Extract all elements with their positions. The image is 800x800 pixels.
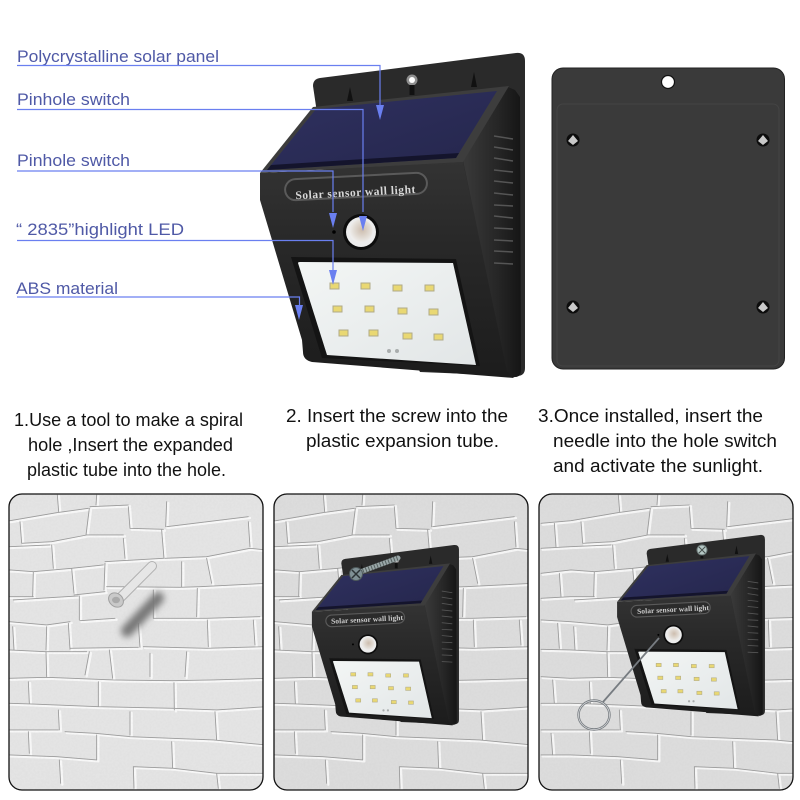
anchor shadow: [127, 598, 158, 631]
step 2 text: [286, 405, 508, 451]
step 3 text: 3.Once installed, insert the: [538, 405, 763, 426]
icon: plastic expansion tube: [106, 566, 152, 610]
main product: solar wall light: [260, 53, 525, 378]
step 2 text: plastic expansion tube.: [306, 430, 499, 451]
lamp: [312, 545, 459, 725]
icon: needle pin with ring: [578, 638, 659, 730]
panel: step 1 wall with anchor: [0, 494, 268, 790]
main product: solar wall light: Solar sensor wall light: [295, 184, 416, 202]
panel: step 2 wall with lamp and screw: [273, 493, 529, 791]
callout arrows: [17, 66, 384, 320]
mounting hole: [662, 76, 674, 88]
label: polycrystalline solar panel: Polycrystalline solar panel: [17, 47, 219, 66]
lamp: Solar sensor wall light: [331, 613, 404, 626]
lamp: [617, 535, 765, 716]
step 1 text: plastic tube into the hole.: [27, 459, 226, 480]
label: ABS material: ABS material: [16, 279, 118, 298]
panel: step 3 wall with lamp and pin: [539, 494, 800, 790]
screws: [566, 134, 770, 314]
step 1 text: [14, 409, 243, 480]
back plate: [552, 68, 784, 369]
label: 2835 highlight LED: “ 2835”highlight LED: [16, 220, 184, 239]
label: pinhole switch 2: Pinhole switch: [17, 151, 130, 170]
step 1 text: hole ,Insert the expanded: [28, 434, 233, 455]
callout labels: [16, 47, 219, 298]
step 3 text: [538, 405, 777, 476]
step 3 text: needle into the hole switch: [553, 430, 777, 451]
step 3 text: and activate the sunlight.: [553, 455, 763, 476]
lamp: Solar sensor wall light: [637, 603, 710, 616]
step 1 text: 1.Use a tool to make a spiral: [14, 409, 243, 430]
label: pinhole switch: Pinhole switch: [17, 90, 130, 109]
icon: screw in plate: [697, 545, 707, 555]
step 2 text: 2. Insert the screw into the: [286, 405, 508, 426]
icon: screw: [350, 558, 398, 580]
